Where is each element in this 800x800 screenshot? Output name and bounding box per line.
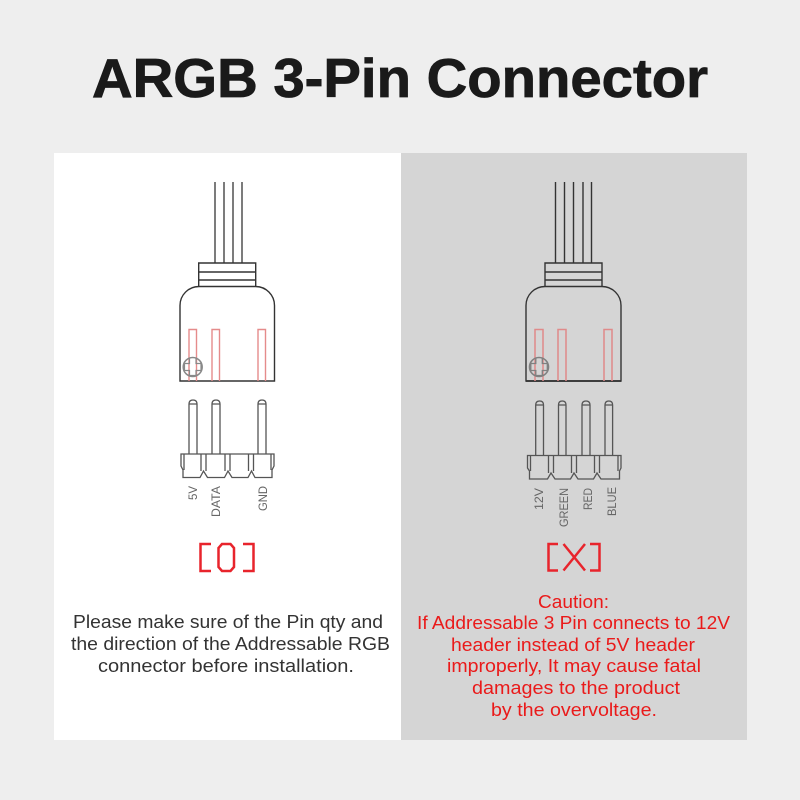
pin label: 12V: 12V — [534, 488, 546, 510]
pin label: RED: RED — [583, 488, 595, 510]
text block: installation note: Please make sure of the Pin qty and — [73, 612, 383, 632]
text block: caution: Caution: — [538, 592, 609, 612]
icon: 3-pin connector plug — [180, 182, 274, 381]
icon: 4-pin header — [528, 401, 621, 479]
title: ARGB 3-Pin Connector — [92, 47, 708, 109]
pin label: BLUE: BLUE — [607, 487, 619, 516]
panel: correct connector — [54, 153, 401, 740]
text block: installation note: the direction of the Addressable RGB — [71, 634, 390, 654]
icon: correct mark — [200, 544, 254, 571]
icon: 3-pin header — [181, 400, 274, 478]
text block: caution: If Addressable 3 Pin connects to 12V — [417, 613, 730, 633]
icon: incorrect mark — [548, 544, 600, 570]
panel: incorrect connector — [401, 153, 747, 740]
text block: installation note — [71, 612, 390, 676]
pin label: DATA: DATA — [211, 486, 223, 517]
pin label: 5V: 5V — [188, 486, 200, 500]
text block: caution: damages to the product — [472, 678, 680, 698]
pin label: GREEN: GREEN — [559, 488, 571, 527]
text block: caution: by the overvoltage. — [491, 700, 657, 720]
pin label: GND: GND — [258, 486, 270, 511]
text block: installation note: connector before installation. — [98, 656, 354, 676]
text block: caution: improperly, It may cause fatal — [447, 656, 701, 676]
icon: 4-pin connector plug — [526, 182, 621, 381]
text block: caution: header instead of 5V header — [451, 635, 695, 655]
text block: caution — [417, 592, 730, 720]
